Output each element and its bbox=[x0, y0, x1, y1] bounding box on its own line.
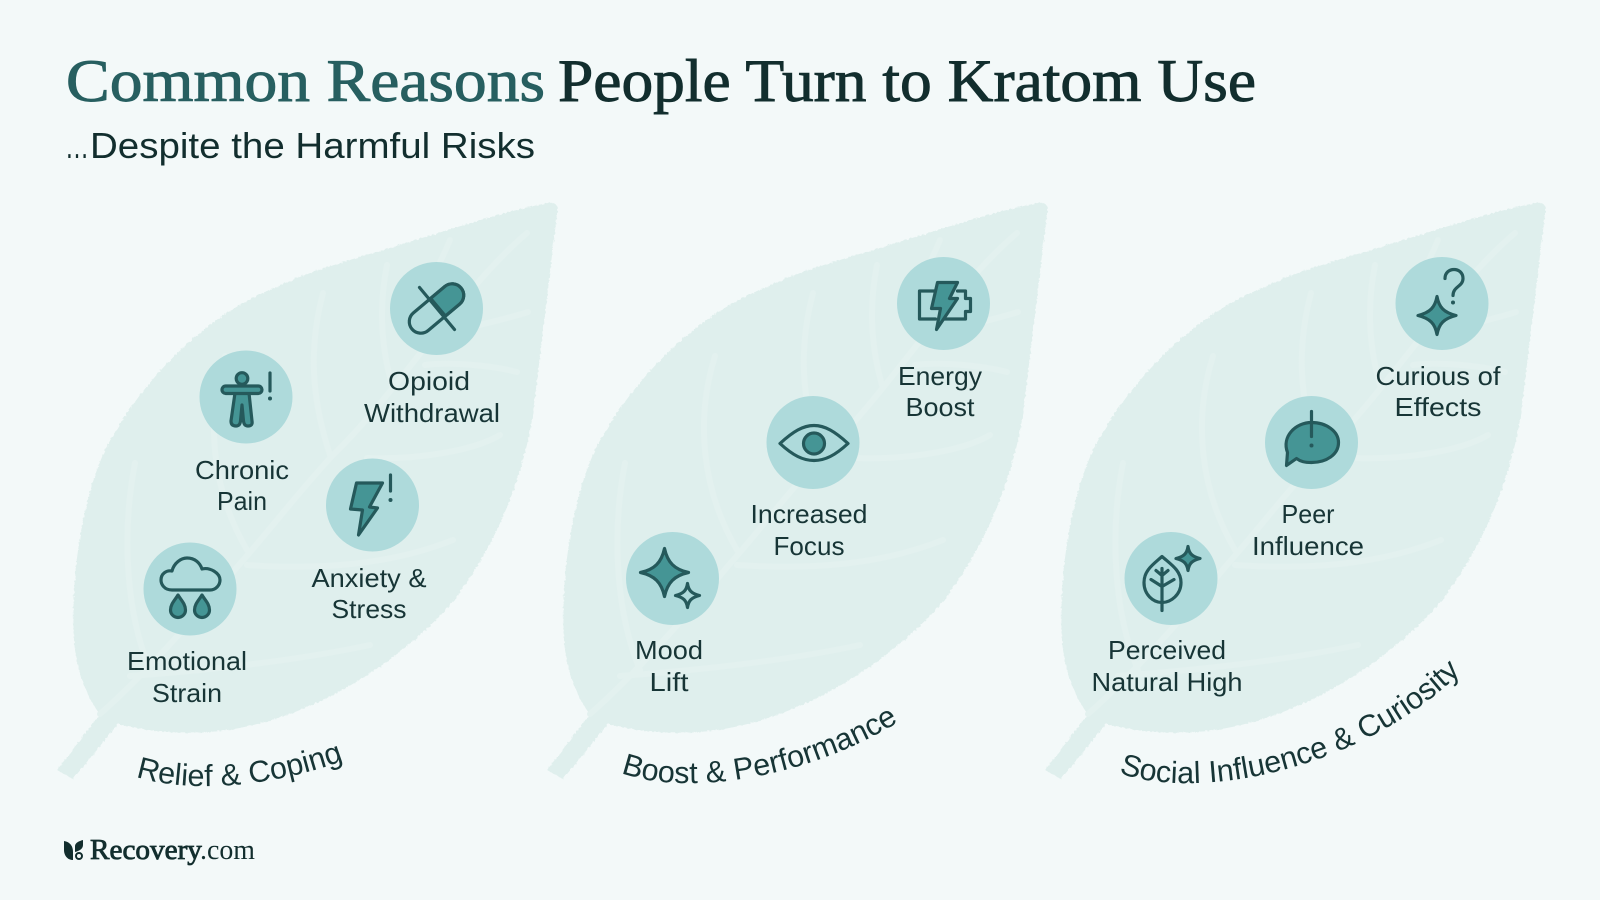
title: People Turn to Kratom Use bbox=[558, 48, 1256, 114]
icon: battery with bolt bbox=[920, 282, 970, 330]
item: energy boost bbox=[897, 257, 990, 422]
item: mood lift bbox=[626, 532, 719, 697]
item: chronic pain: Pain bbox=[217, 486, 267, 516]
item: anxiety and stress bbox=[312, 458, 426, 624]
item: increased focus: Increased bbox=[750, 499, 868, 529]
item: increased focus bbox=[750, 396, 868, 561]
item: peer influence: Influence bbox=[1252, 531, 1364, 561]
icon: speech bubble with exclamation bbox=[1286, 412, 1338, 466]
item: emotional strain: Emotional bbox=[127, 646, 247, 676]
item: perceived natural high: Natural High bbox=[1092, 667, 1242, 697]
item: curious of effects bbox=[1376, 257, 1501, 422]
panel: social influence and curiosity leaf bbox=[1046, 202, 1546, 784]
item: perceived natural high: Perceived bbox=[1108, 635, 1226, 665]
item: chronic pain bbox=[195, 350, 292, 516]
item: mood lift: Lift bbox=[650, 667, 689, 697]
icon: lightning with exclamation bbox=[350, 475, 392, 535]
item: increased focus: Focus bbox=[774, 531, 844, 561]
icon: logo mark bbox=[64, 840, 83, 860]
item: chronic pain: Chronic bbox=[195, 455, 289, 485]
icon: body with exclamation bbox=[222, 373, 272, 426]
item: opioid withdrawal: Opioid bbox=[388, 366, 470, 396]
item: perceived natural high bbox=[1092, 532, 1242, 697]
category label: relief and coping: Relief & Coping bbox=[138, 746, 342, 786]
title: Common Reasons bbox=[66, 48, 545, 114]
panel: relief and coping leaf bbox=[58, 202, 558, 786]
category label: social influence and curiosity: Social Influence & Curiosity bbox=[1121, 660, 1458, 784]
item: peer influence: Peer bbox=[1282, 499, 1335, 529]
category label: boost and performance: Boost & Performance bbox=[623, 711, 896, 784]
item: opioid withdrawal bbox=[364, 262, 500, 428]
icon: eye bbox=[780, 426, 848, 460]
panel: boost and performance leaf bbox=[548, 202, 1048, 784]
item: anxiety and stress: Stress bbox=[332, 594, 406, 624]
item: curious of effects: Curious of bbox=[1376, 361, 1501, 391]
item: opioid withdrawal: Withdrawal bbox=[364, 398, 500, 428]
title bbox=[66, 48, 1256, 114]
logo: Recovery.com: Recovery.com bbox=[90, 835, 255, 866]
icon: sparkles bbox=[640, 548, 700, 608]
item: emotional strain bbox=[127, 542, 247, 708]
icon: rain cloud bbox=[161, 558, 220, 618]
subtitle: … bbox=[65, 125, 89, 166]
item: emotional strain: Strain bbox=[152, 678, 222, 708]
icon: leaf with sparkle bbox=[1144, 546, 1200, 610]
item: peer influence bbox=[1252, 396, 1364, 561]
item: anxiety and stress: Anxiety & bbox=[312, 563, 426, 593]
item: mood lift: Mood bbox=[635, 635, 703, 665]
item: curious of effects: Effects bbox=[1394, 392, 1482, 422]
item: energy boost: Energy bbox=[898, 361, 982, 391]
icon: crossed pill bbox=[405, 279, 468, 338]
icon: sparkle with question mark bbox=[1418, 270, 1463, 334]
item: energy boost: Boost bbox=[906, 392, 975, 422]
subtitle: Despite the Harmful Risks bbox=[90, 125, 535, 166]
